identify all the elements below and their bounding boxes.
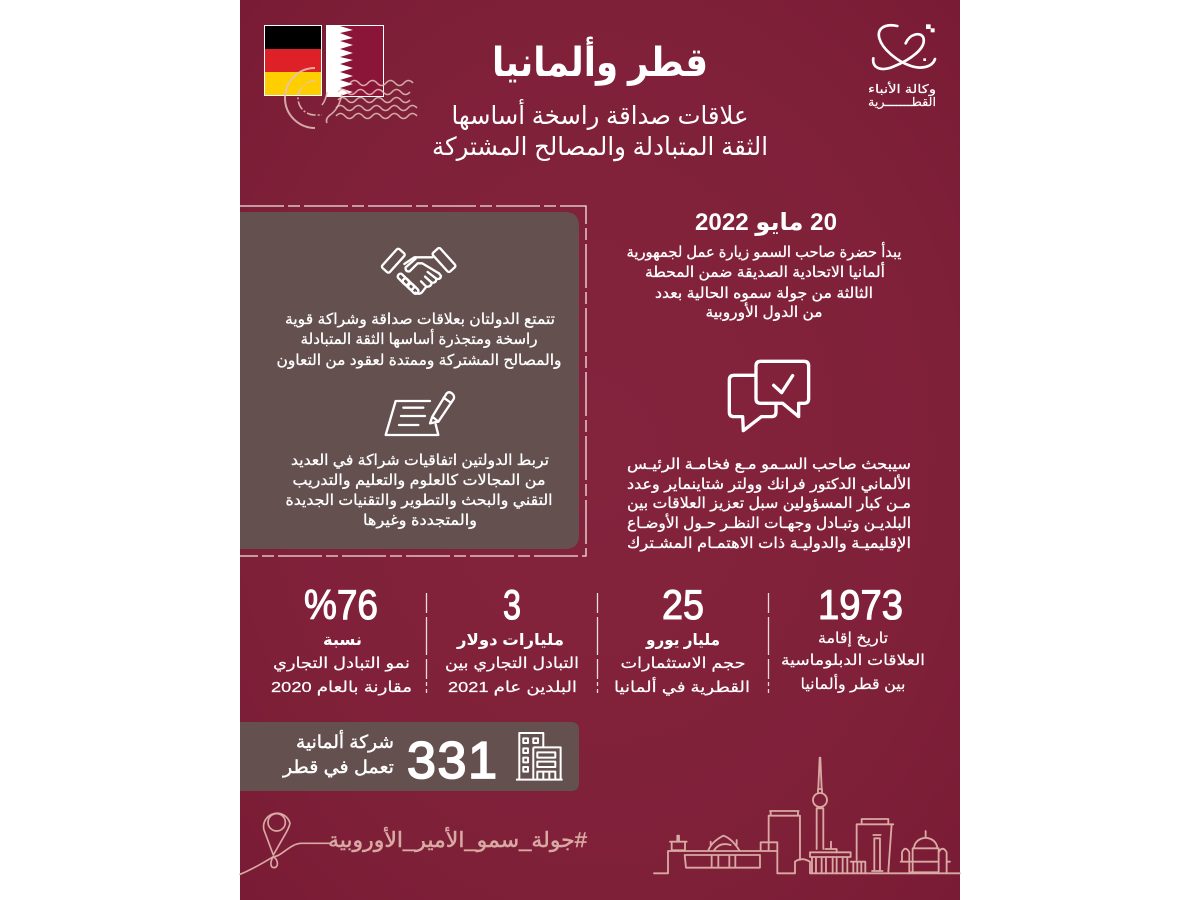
text: agreements: التقني والبحث والتطوير والتقنيات الجديدة — [286, 492, 552, 510]
text: friendship — [276, 311, 562, 369]
text block: talks: مـن كبار المسؤولين سبل تعزيز العلاقات بين — [627, 495, 911, 512]
stat: 25: مليار يورو — [645, 632, 720, 649]
icon: signing document — [386, 392, 454, 435]
stat: 1973: بين قطر وألمانيا — [800, 674, 906, 693]
date heading: 20 مايو 2022 — [695, 209, 837, 236]
icon: buildings — [516, 733, 563, 780]
text: companies: تعمل في قطر — [282, 757, 394, 778]
text block: visit: ألمانيا الاتحادية الصديقة ضمن المحطة — [645, 262, 885, 281]
text block: talks: سيبحث صاحب السـمو مـع فخامـة الرئيـس — [627, 456, 911, 473]
stat: 3: 3 — [503, 581, 521, 628]
stat: 76%: مقارنة بالعام 2020 — [271, 679, 412, 696]
text block: talks: الإقليميـة والدوليـة ذات الاهتمـام المشـترك — [627, 535, 911, 552]
flags and postmark — [264, 25, 417, 128]
text: friendship: والمصالح المشتركة وممتدة لعقود من التعاون — [276, 352, 562, 369]
skyline of Berlin — [654, 758, 960, 873]
flag: Qatar — [326, 25, 384, 97]
subtitle: الثقة المتبادلة والمصالح المشتركة — [432, 133, 768, 162]
stat: 3: التبادل التجاري بين — [445, 655, 579, 673]
flag: Germany — [264, 25, 322, 96]
text: friendship: تتمتع الدولتان بعلاقات صداقة وشراكة قوية — [285, 311, 555, 328]
text block: visit: من الدول الأوروبية — [706, 302, 822, 321]
logo: Qatar News Agency — [868, 24, 936, 110]
dashed frame — [240, 206, 586, 556]
stat: 76% — [271, 581, 412, 696]
stat: 76%: %76 — [304, 581, 378, 628]
hashtag: #جولة_سمو_الأمير_الأوروبية — [328, 827, 587, 852]
stat: 76%: نسبة — [323, 632, 362, 649]
logo text — [868, 81, 936, 110]
text: agreements: تربط الدولتين اتفاقيات شراكة في العديد — [291, 452, 549, 470]
text block: talks: الألماني الدكتور فرانك وولتر شتاينماير وعدد — [627, 474, 911, 494]
text block: visit — [626, 242, 902, 321]
text: companies — [282, 730, 394, 778]
stat: 25: حجم الاستثمارات — [620, 655, 746, 672]
text: friendship: راسخة ومتجذرة أساسها الثقة المتبادلة — [300, 329, 538, 348]
text: agreements: من المجالات كالعلوم والتعليم والتدريب — [292, 472, 546, 489]
stat: 1973: تاريخ إقامة — [818, 630, 888, 647]
stat: 3: مليارات دولار — [456, 632, 564, 649]
stat: 25: 25 — [662, 581, 704, 628]
text block: visit: يبدأ حضرة صاحب السمو زيارة عمل لجمهورية — [626, 242, 902, 261]
text: companies: شركة ألمانية — [296, 730, 394, 753]
text: agreements — [286, 452, 552, 529]
logo text: وكالة الأنباء — [868, 81, 936, 97]
stat: 1973: العلاقات الدبلوماسية — [781, 652, 925, 669]
stat: 3: البلدين عام 2021 — [448, 679, 577, 696]
stat: 1973 — [781, 581, 925, 693]
stat: 25 — [614, 581, 750, 697]
icon: location pin with route line — [240, 813, 329, 874]
subtitle — [432, 98, 768, 162]
stat: 25: القطرية في ألمانيا — [614, 677, 750, 697]
logo text: القطـــــــرية — [868, 95, 936, 110]
stat: 76%: نمو التبادل التجاري — [273, 655, 410, 673]
number 331: 331 — [407, 732, 497, 790]
stat: 3 — [445, 581, 579, 696]
text: agreements: والمتجددة وغيرها — [363, 512, 477, 529]
text block: talks: البلديـن وتبـادل وجهـات النظـر حـول الأوضـاع — [627, 513, 911, 532]
text block: talks — [627, 456, 911, 552]
subtitle: علاقات صداقة راسخة أساسها — [452, 98, 748, 131]
postmark stamp — [285, 68, 417, 128]
icon: chat bubbles with check — [729, 361, 809, 431]
panel: German companies — [240, 722, 579, 791]
text block: visit: الثالثة من جولة سموه الحالية بعدد — [655, 285, 873, 302]
panel: relations — [240, 212, 579, 549]
icon: handshake — [381, 247, 456, 295]
background panel — [240, 0, 960, 900]
stat: 1973: 1973 — [818, 581, 903, 628]
title: قطر وألمانيا — [492, 36, 708, 86]
